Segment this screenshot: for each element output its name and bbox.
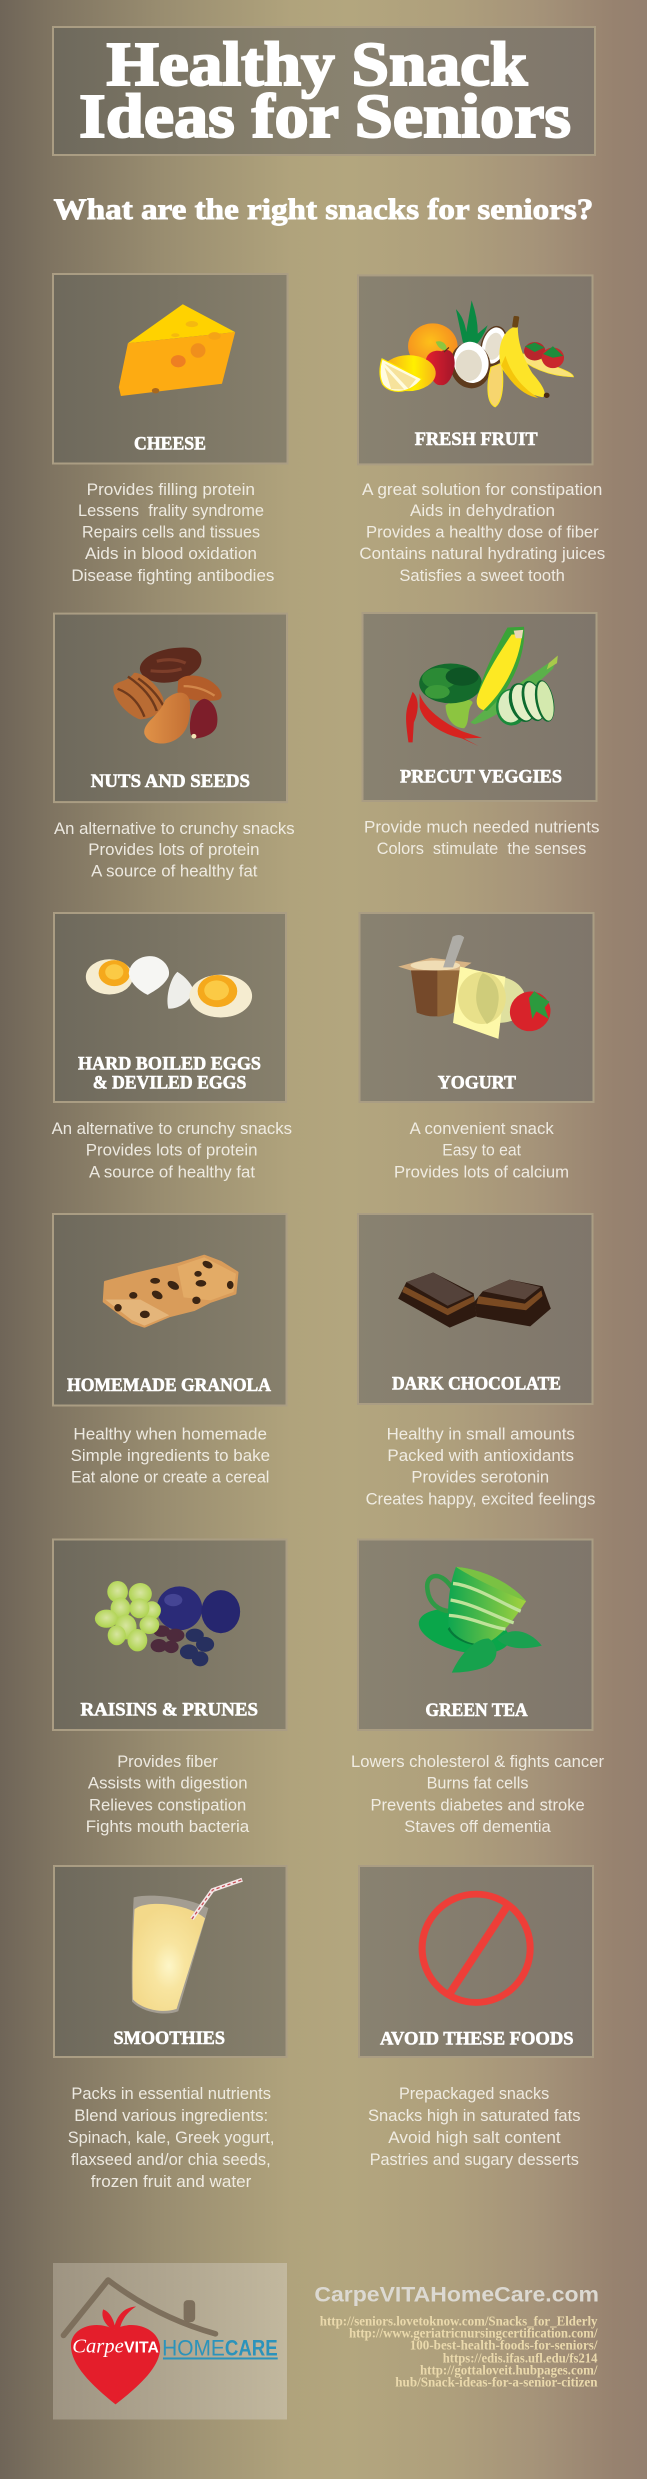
list: precut veggies: Colors stimulate the senses	[377, 840, 586, 858]
heading: eggs	[78, 1054, 261, 1094]
icon: veggies	[406, 627, 558, 746]
heading: raisins and prunes: RAISINS & PRUNES	[80, 1701, 258, 1721]
card: cheese	[53, 274, 288, 585]
source links: hub/Snack-ideas-for-a-senior-citizen	[395, 2374, 598, 2389]
list: yogurt: A convenient snack	[410, 1120, 554, 1138]
list: yogurt	[394, 1120, 569, 1181]
list: raisins and prunes: Relieves constipation	[89, 1797, 246, 1815]
heading: dark chocolate: DARK CHOCOLATE	[392, 1374, 561, 1394]
list: green tea: Staves off dementia	[404, 1818, 552, 1836]
list: cheese: Disease fighting antibodies	[71, 567, 274, 585]
icon: smoothie	[132, 1880, 242, 2014]
logo: CarpeVITA Home Care	[64, 2280, 278, 2404]
list: nuts and seeds: Provides lots of protein	[88, 841, 260, 859]
list: yogurt: Easy to eat	[442, 1142, 521, 1160]
card: dark chocolate	[358, 1214, 595, 1508]
icon: chocolate	[398, 1273, 551, 1328]
list: cheese	[71, 481, 274, 585]
logo: CarpeVITA Home Care: HOME	[162, 2336, 225, 2360]
list: raisins and prunes: Assists with digestion	[88, 1775, 248, 1793]
source links: 100-best-health-foods-for-seniors/	[410, 2337, 598, 2352]
title panel	[53, 27, 595, 155]
list: nuts and seeds	[54, 820, 295, 881]
logo panel	[53, 2263, 287, 2420]
card: nuts and seeds	[54, 614, 295, 881]
card: eggs	[52, 913, 292, 1181]
source links: https://edis.ifas.ufl.edu/fs214	[443, 2351, 598, 2366]
source links: http://seniors.lovetoknow.com/Snacks_for_Elderly	[320, 2313, 598, 2328]
list: cheese: Aids in blood oxidation	[85, 545, 257, 563]
card: raisins and prunes	[53, 1540, 286, 1836]
logo: CarpeVITA Home Care: Carpe	[72, 2336, 124, 2358]
logo: CarpeVITA Home Care: CARE	[225, 2336, 278, 2360]
list: yogurt: Provides lots of calcium	[394, 1163, 569, 1181]
card: homemade granola	[53, 1214, 286, 1487]
card: avoid these foods	[359, 1866, 593, 2169]
heading: eggs: HARD BOILED EGGS	[78, 1054, 261, 1074]
list: fresh fruit: Satisfies a sweet tooth	[399, 567, 565, 585]
list: smoothies	[68, 2085, 274, 2191]
list: raisins and prunes: Provides fiber	[117, 1753, 218, 1771]
card: fresh fruit	[358, 275, 605, 585]
list: precut veggies	[364, 818, 600, 858]
heading: green tea: GREEN TEA	[425, 1701, 528, 1721]
heading: avoid these foods: AVOID THESE FOODS	[380, 2030, 574, 2050]
list: dark chocolate: Packed with antioxidants	[387, 1447, 574, 1465]
heading: nuts and seeds: NUTS AND SEEDS	[91, 772, 250, 792]
list: homemade granola: Healthy when homemade	[73, 1426, 267, 1444]
list: green tea	[351, 1753, 604, 1836]
heading: fresh fruit: FRESH FRUIT	[415, 430, 538, 450]
list: avoid these foods: Avoid high salt content	[388, 2129, 561, 2147]
list: smoothies: Packs in essential nutrients	[71, 2085, 271, 2103]
list: green tea: Lowers cholesterol & fights cancer	[351, 1753, 604, 1771]
icon: fruit	[380, 300, 574, 407]
logo: CarpeVITA Home Care: VITA	[124, 2339, 159, 2357]
icon: nuts	[113, 648, 222, 744]
list: green tea: Burns fat cells	[427, 1775, 528, 1793]
list: smoothies: Spinach, kale, Greek yogurt,	[68, 2129, 274, 2147]
list: eggs	[52, 1120, 292, 1181]
list: raisins and prunes: Fights mouth bacteria	[86, 1818, 250, 1836]
card: green tea	[351, 1540, 604, 1836]
list: nuts and seeds: An alternative to crunchy snacks	[54, 820, 295, 838]
heading: cheese: CHEESE	[134, 435, 206, 455]
list: fresh fruit: Provides a healthy dose of fiber	[366, 524, 599, 542]
list: precut veggies: Provide much needed nutrients	[364, 818, 600, 836]
list: eggs: An alternative to crunchy snacks	[52, 1120, 292, 1138]
heading: precut veggies: PRECUT VEGGIES	[400, 768, 562, 788]
list: homemade granola: Simple ingredients to bake	[71, 1447, 270, 1465]
heading: yogurt: YOGURT	[438, 1074, 517, 1094]
list: cheese: Lessens frality syndrome	[78, 502, 264, 520]
heading: smoothies: SMOOTHIES	[114, 2029, 225, 2049]
icon: green tea	[415, 1567, 542, 1673]
list: fresh fruit	[359, 481, 605, 585]
title: Healthy Snack	[106, 31, 528, 99]
list: avoid these foods: Pastries and sugary desserts	[370, 2151, 579, 2169]
card: smoothies	[54, 1866, 286, 2191]
list: dark chocolate: Healthy in small amounts	[387, 1426, 575, 1444]
icon: cheese	[119, 304, 235, 396]
icon: eggs	[86, 956, 252, 1017]
list: fresh fruit: A great solution for constipation	[362, 481, 602, 499]
icon: yogurt	[398, 935, 555, 1039]
heading: eggs: & DEVILED EGGS	[93, 1074, 246, 1094]
list: homemade granola	[71, 1426, 270, 1487]
list: eggs: Provides lots of protein	[86, 1142, 258, 1160]
list: cheese: Provides filling protein	[87, 481, 255, 499]
website: CarpeVITAHomeCare.com	[314, 2283, 599, 2306]
list: smoothies: frozen fruit and water	[91, 2173, 252, 2191]
list: dark chocolate	[366, 1426, 595, 1508]
list: homemade granola: Eat alone or create a cereal	[71, 1469, 269, 1487]
list: avoid these foods	[368, 2085, 580, 2169]
card: precut veggies	[362, 613, 600, 858]
list: cheese: Repairs cells and tissues	[82, 524, 260, 542]
list: raisins and prunes	[86, 1753, 250, 1836]
card: yogurt	[360, 913, 594, 1181]
icon: prohibition sign	[422, 1894, 530, 2002]
list: smoothies: Blend various ingredients:	[74, 2107, 268, 2125]
list: avoid these foods: Prepackaged snacks	[399, 2085, 549, 2103]
source links	[320, 2313, 598, 2389]
list: avoid these foods: Snacks high in saturated fats	[368, 2107, 580, 2125]
list: fresh fruit: Aids in dehydration	[410, 502, 555, 520]
icon: granola	[104, 1256, 237, 1326]
list: dark chocolate: Provides serotonin	[411, 1469, 549, 1487]
heading: homemade granola: HOMEMADE GRANOLA	[67, 1376, 272, 1396]
list: dark chocolate: Creates happy, excited feelings	[366, 1490, 595, 1508]
list: fresh fruit: Contains natural hydrating juices	[359, 545, 605, 563]
list: nuts and seeds: A source of healthy fat	[91, 863, 258, 881]
list: green tea: Prevents diabetes and stroke	[370, 1797, 585, 1815]
source links: http://gottaloveit.hubpages.com/	[420, 2363, 598, 2378]
list: eggs: A source of healthy fat	[89, 1163, 255, 1181]
icon: raisins and prunes	[95, 1581, 240, 1666]
title: Ideas for Seniors	[79, 83, 571, 151]
list: smoothies: flaxseed and/or chia seeds,	[71, 2151, 271, 2169]
subtitle: What are the right snacks for seniors?	[54, 193, 593, 226]
title	[79, 31, 571, 151]
source links: http://www.geriatricnursingcertification.com/	[349, 2325, 598, 2340]
